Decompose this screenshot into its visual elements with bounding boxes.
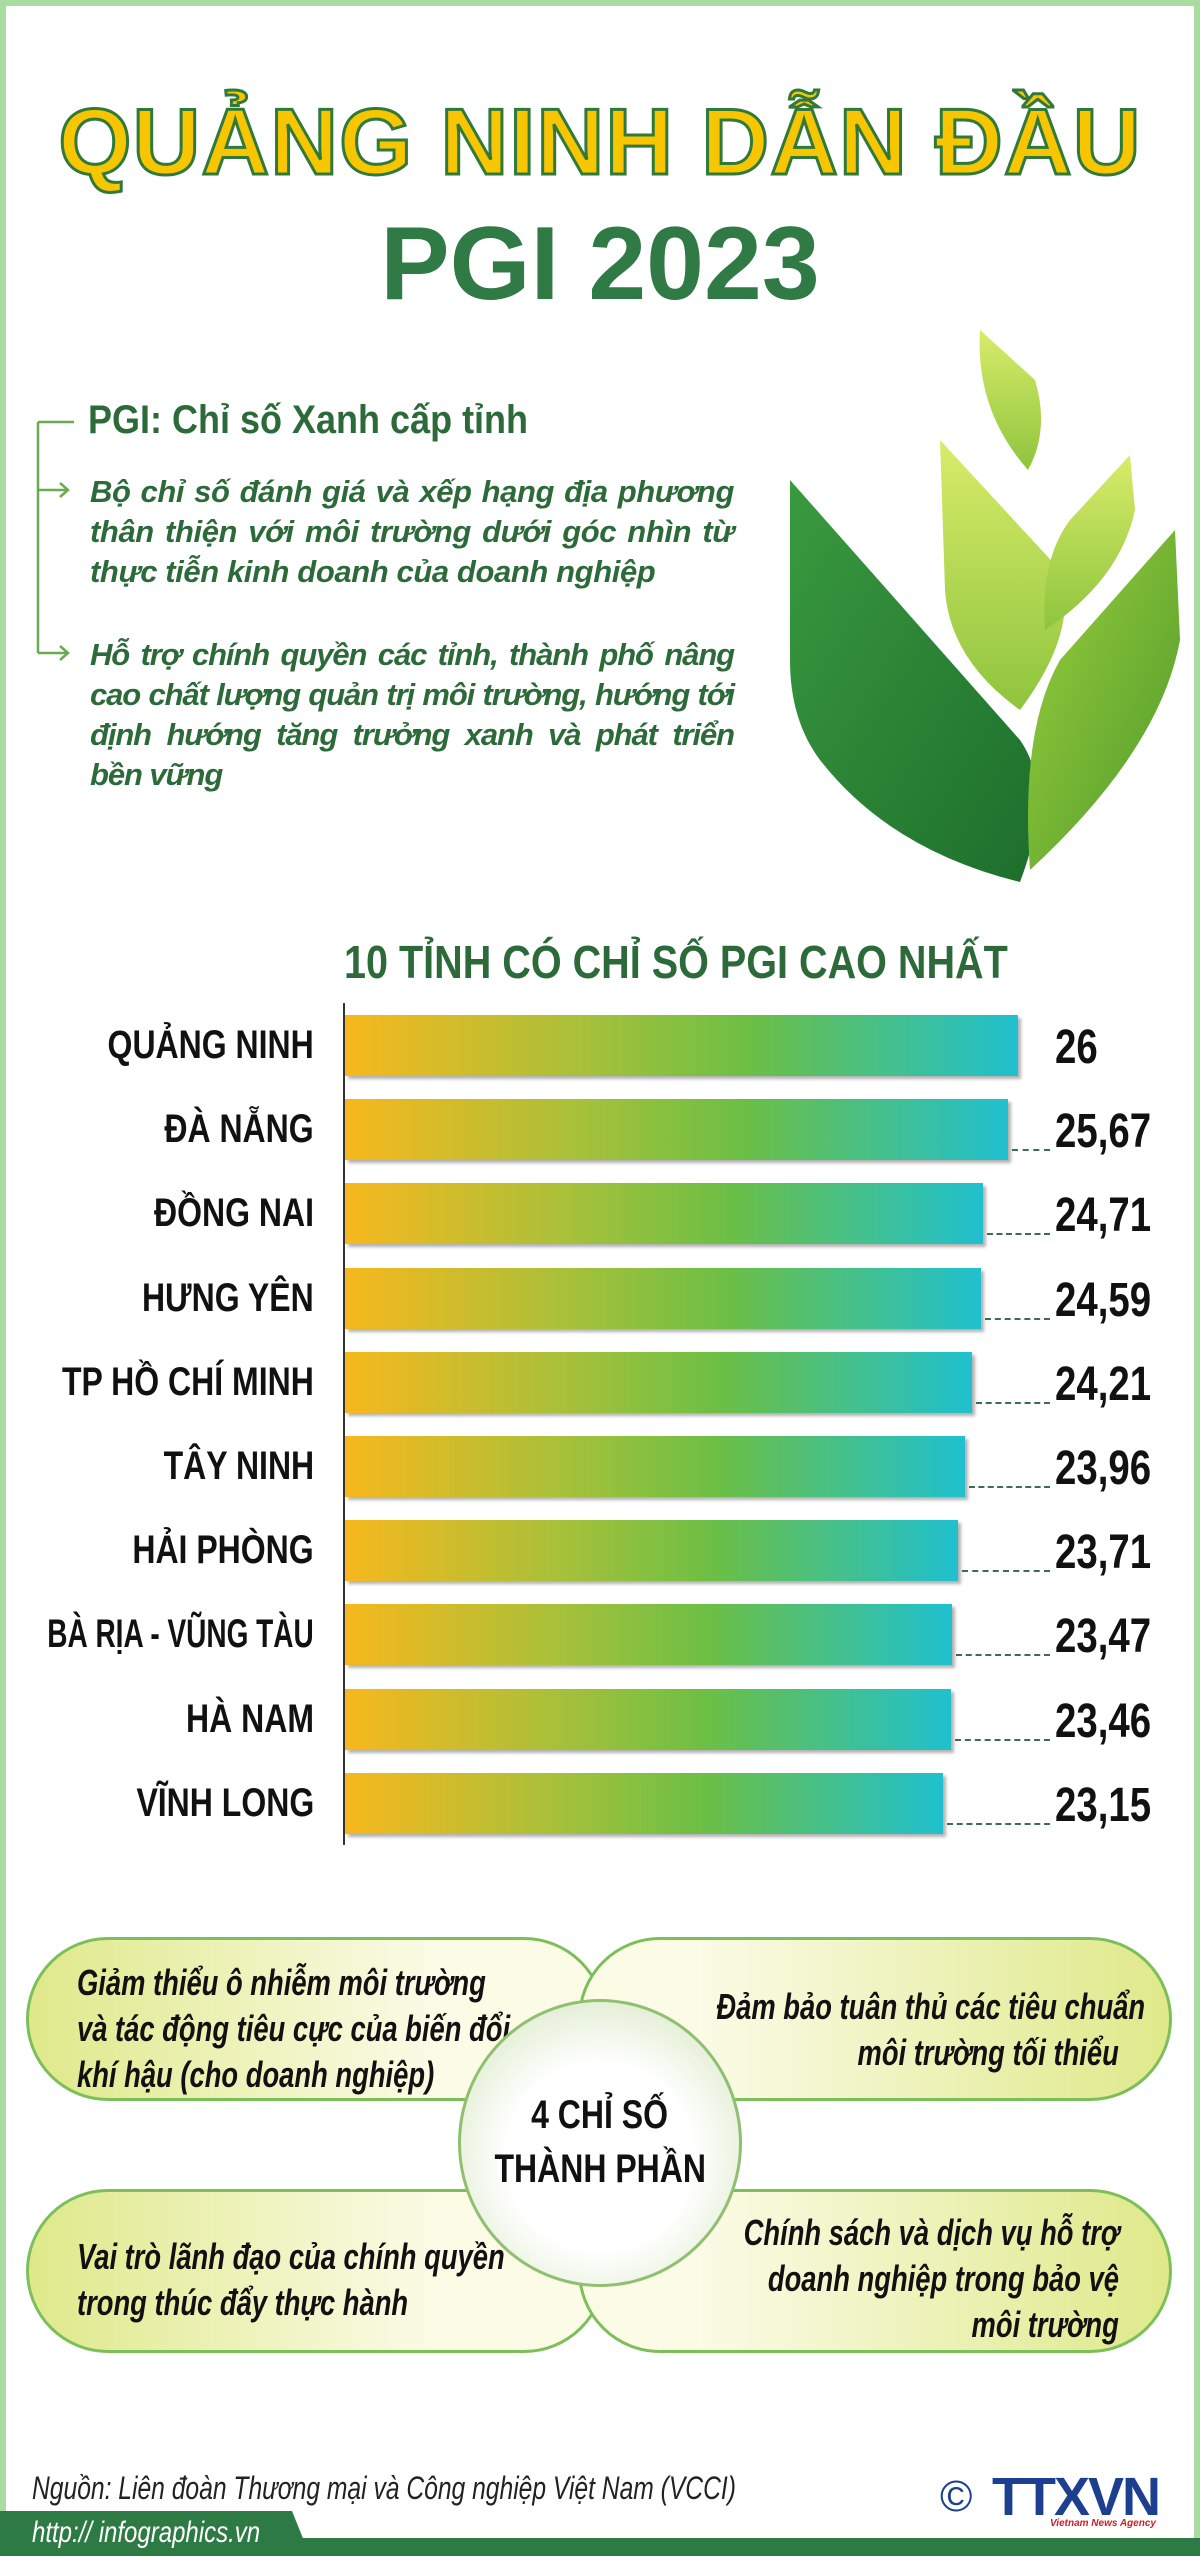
bar: Quảng Ninh — [108, 1015, 1098, 1081]
bar: Vĩnh Long: VĨNH LONG — [136, 1781, 314, 1825]
bar: TP Hồ Chí Minh: TP HỒ CHÍ MINH — [62, 1360, 314, 1404]
pill: bottom-right: Chính sách và dịch vụ hỗ trợ — [743, 2212, 1119, 2253]
source note: Nguồn: Liên đoàn Thương mại và Công nghiệp Việt Nam (VCCI) — [32, 2470, 736, 2506]
pill: top-left: Giảm thiểu ô nhiễm môi trường — [77, 1962, 486, 2003]
bar: Hải Phòng — [133, 1520, 1151, 1586]
footer bar — [0, 2538, 1200, 2556]
bullet 1: thực tiễn kinh doanh của doanh nghiệp — [90, 554, 655, 589]
bar: Đồng Nai: ĐỒNG NAI — [154, 1191, 314, 1235]
bar: Hải Phòng: HẢI PHÒNG — [133, 1528, 314, 1572]
footer tab: website: http:// infographics.vn — [32, 2516, 260, 2549]
bar chart — [47, 1003, 1151, 1845]
pill: top-right: Đảm bảo tuân thủ các tiêu chuẩn — [716, 1986, 1145, 2027]
bar: Đồng Nai: 24,71 — [1055, 1189, 1151, 1242]
logo: TTXVN: TTXVN — [992, 2467, 1159, 2527]
bar: Hưng Yên — [142, 1268, 1151, 1334]
bar: TP Hồ Chí Minh: 24,21 — [1055, 1358, 1151, 1411]
pill: top-left: khí hậu (cho doanh nghiệp) — [77, 2054, 434, 2095]
pill: top-right: môi trường tối thiểu — [858, 2032, 1119, 2073]
bar: Tây Ninh: 23,96 — [1055, 1442, 1151, 1495]
bullet 2 — [90, 637, 736, 792]
bullet 1: Bộ chỉ số đánh giá và xếp hạng địa phương — [90, 474, 734, 509]
bar: Hưng Yên: 24,59 — [1055, 1274, 1151, 1327]
bracket line — [36, 420, 74, 661]
bar: Hưng Yên: HƯNG YÊN — [142, 1276, 314, 1320]
bar: TP Hồ Chí Minh — [62, 1352, 1151, 1418]
bar: Đà Nẵng — [164, 1099, 1151, 1165]
bar: Tây Ninh — [163, 1436, 1151, 1502]
center circle: THÀNH PHẦN — [494, 2147, 706, 2191]
pill: bottom-right: doanh nghiệp trong bảo vệ — [768, 2258, 1119, 2299]
logo: TTXVN: Vietnam News Agency — [1050, 2518, 1156, 2529]
pill: bottom-right: môi trường — [972, 2304, 1119, 2345]
bar: Hà Nam: HÀ NAM — [186, 1697, 314, 1741]
footer tab: website — [0, 2511, 303, 2548]
bullet 1: thân thiện với môi trường dưới góc nhìn từ — [90, 514, 734, 549]
bar: Hà Nam: 23,46 — [1055, 1695, 1151, 1748]
title: QUẢNG NINH DẪN ĐẦU — [58, 89, 1142, 194]
pill: top-left — [26, 1937, 606, 2101]
icon: leaf illustration — [790, 330, 1180, 882]
bar: Quảng Ninh: 26 — [1055, 1021, 1098, 1074]
pill: bottom-left: Vai trò lãnh đạo của chính quyền — [77, 2236, 505, 2277]
bar: Bà Rịa - Vũng Tàu: BÀ RỊA - VŨNG TÀU — [47, 1612, 314, 1656]
pill: bottom-left: trong thúc đẩy thực hành — [77, 2282, 408, 2323]
pill: bottom-right — [578, 2189, 1172, 2353]
bar: Đà Nẵng: 25,67 — [1055, 1105, 1151, 1158]
logo: TTXVN: © — [940, 2472, 972, 2521]
panel: PGI definition — [36, 398, 736, 792]
bullet 2: cao chất lượng quản trị môi trường, hướng tới — [90, 677, 734, 712]
bar: Đồng Nai — [154, 1183, 1151, 1249]
panel: 4 component indices — [26, 1937, 1172, 2353]
subtitle: PGI 2023 — [380, 206, 820, 322]
pill: top-left: và tác động tiêu cực của biến đổi — [77, 2008, 510, 2049]
bar: Hải Phòng: 23,71 — [1055, 1526, 1151, 1579]
bar: Vĩnh Long: 23,15 — [1055, 1779, 1151, 1832]
bullet 2: bền vững — [90, 757, 222, 792]
center circle — [458, 1999, 742, 2287]
chart title: 10 TỈNH CÓ CHỈ SỐ PGI CAO NHẤT — [344, 936, 1008, 988]
bar: Đà Nẵng: ĐÀ NẴNG — [165, 1107, 314, 1151]
bullet 2: Hỗ trợ chính quyền các tỉnh, thành phố nâng — [90, 637, 734, 672]
center circle: 4 CHỈ SỐ — [532, 2093, 668, 2137]
bar: Bà Rịa - Vũng Tàu — [47, 1604, 1151, 1670]
bar: Hà Nam — [186, 1689, 1151, 1755]
pill: top-right — [578, 1937, 1172, 2101]
heading: PGI: Chỉ số Xanh cấp tỉnh — [88, 398, 528, 442]
bullet 1 — [90, 474, 736, 589]
bar: Bà Rịa - Vũng Tàu: 23,47 — [1055, 1610, 1151, 1663]
bar: Vĩnh Long — [136, 1773, 1151, 1839]
bullet 2: định hướng tăng trưởng xanh và phát triển — [90, 717, 734, 752]
pill: bottom-left — [26, 2189, 606, 2353]
bar: Quảng Ninh: QUẢNG NINH — [108, 1023, 314, 1067]
bar: Tây Ninh: TÂY NINH — [163, 1444, 314, 1488]
